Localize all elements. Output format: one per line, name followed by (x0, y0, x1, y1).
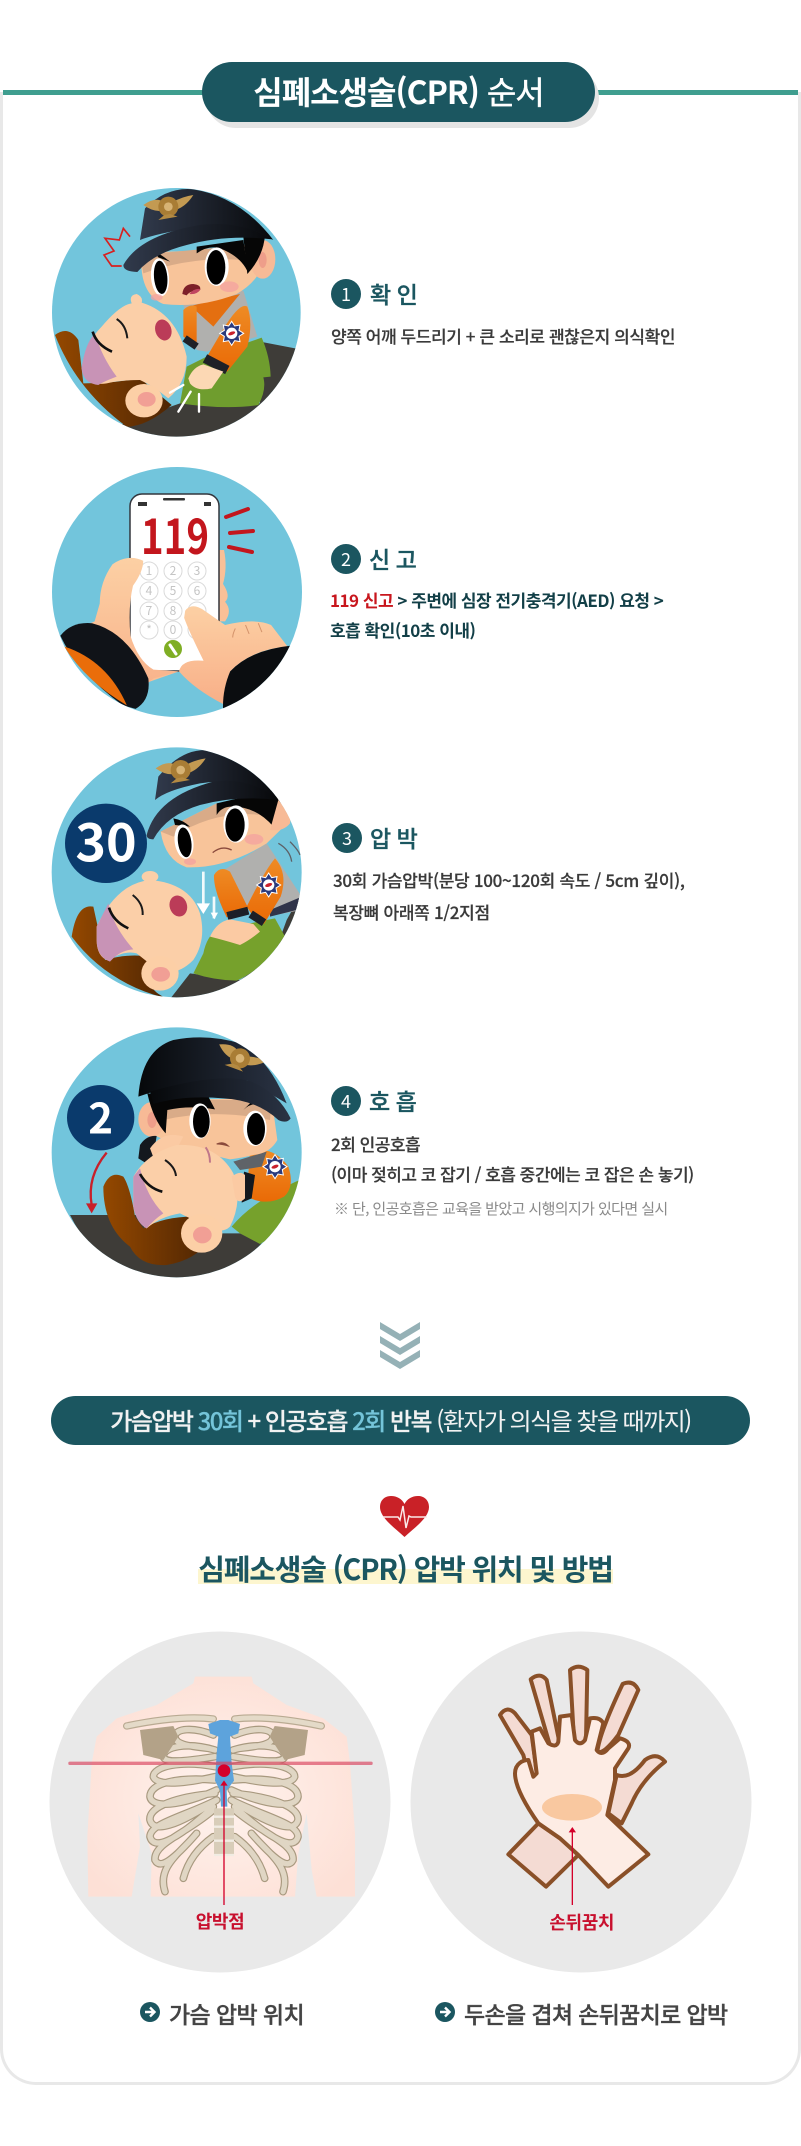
step 3 description: 복장뼈 아래쪽 1/2지점 (333, 899, 490, 924)
step 4 description (331, 1131, 694, 1186)
icon: down chevrons (380, 1322, 420, 1369)
repeat banner: 가슴압박 30회 + 인공호흡 2회 반복 (환자가 의식을 찾을 때까지) (110, 1402, 691, 1437)
illustration: step 1 check consciousness (52, 188, 301, 437)
phone: 0 (170, 621, 177, 638)
step 4 description: (이마 젖히고 코 잡기 / 호흡 중간에는 코 잡은 손 놓기) (331, 1161, 694, 1186)
step 2 number (331, 544, 361, 574)
step 3 description: 30회 가슴압박(분당 100~120회 속도 / 5cm 깊이), (333, 867, 685, 892)
repeat banner (51, 1396, 750, 1445)
heading: CPR position and method: 심폐소생술 (CPR) 압박 위치 및 방법 (198, 1547, 613, 1589)
diagram: chest compression point (50, 1632, 390, 1972)
step 4 description: 2회 인공호흡 (331, 1131, 420, 1156)
title rule (3, 90, 798, 95)
step 3 number (332, 823, 362, 853)
icon: heart with pulse (380, 1496, 429, 1537)
phone: 1 (146, 562, 152, 579)
step 2 number: 2 (341, 546, 351, 572)
badge: 2 breaths: 2 (88, 1085, 113, 1146)
phone: 119 (141, 498, 209, 568)
phone: 8 (170, 602, 177, 619)
heading highlight (198, 1569, 613, 1584)
caption: overlap hands: 두손을 겹쳐 손뒤꿈치로 압박 (464, 1996, 728, 2030)
phone: 2 (170, 562, 177, 579)
phone: 6 (194, 582, 201, 599)
left sleeve (60, 623, 149, 709)
step 4 heading: 호 흡 (369, 1083, 416, 1117)
badge: 30 compressions (65, 802, 147, 883)
title pill: 심폐소생술(CPR) 순서 (253, 68, 544, 114)
right sleeve (223, 646, 292, 709)
torso (87, 1677, 355, 1897)
step 1 number: 1 (341, 281, 351, 307)
right hand (179, 606, 287, 704)
icon: arrow (435, 2002, 455, 2022)
badge: 30 compressions: 30 (75, 802, 137, 877)
step 4 number (331, 1086, 361, 1116)
step 4 number: 4 (341, 1088, 351, 1114)
diagram: heel of hand (410, 1632, 752, 1972)
title pill (202, 62, 595, 122)
phone: * (146, 621, 152, 638)
icon: arrow (140, 2002, 160, 2022)
step 3 description (333, 867, 685, 924)
phone (130, 494, 219, 671)
step 1 number (331, 279, 361, 309)
step 4 note: ※ 단, 인공호흡은 교육을 받았고 시행의지가 있다면 실시 (334, 1198, 668, 1219)
left hand (90, 558, 179, 682)
step 3 heading: 압 박 (370, 820, 417, 854)
phone: 4 (146, 582, 153, 599)
diagram: heel of hand: 손뒤꿈치 (549, 1909, 614, 1935)
badge: 2 breaths (67, 1085, 134, 1150)
step 1 description: 양쪽 어깨 두드리기 + 큰 소리로 괜찮은지 의식확인 (331, 323, 675, 348)
rib cage (150, 1730, 298, 1892)
step 2 description: 호흡 확인(10초 이내) (330, 617, 475, 642)
arrow: head tilt (86, 1153, 107, 1213)
caption: chest position: 가슴 압박 위치 (169, 1996, 304, 2030)
step 2 description (330, 587, 664, 642)
illustration: step 4 rescue breaths (52, 1027, 302, 1278)
illustration: step 2 call 119 (52, 467, 302, 717)
phone: 7 (146, 602, 153, 619)
phone: 5 (170, 582, 177, 599)
step 2 heading: 신 고 (369, 541, 416, 575)
illustration: step 3 compressions (52, 747, 302, 998)
step 1 heading: 확 인 (370, 276, 417, 310)
diagram: chest compression point: 압박점 (196, 1908, 244, 1934)
phone: 3 (194, 562, 200, 579)
step 3 number: 3 (342, 825, 352, 851)
step 2 description: 119 신고 > 주변에 심장 전기충격기(AED) 요청 > (330, 587, 663, 612)
